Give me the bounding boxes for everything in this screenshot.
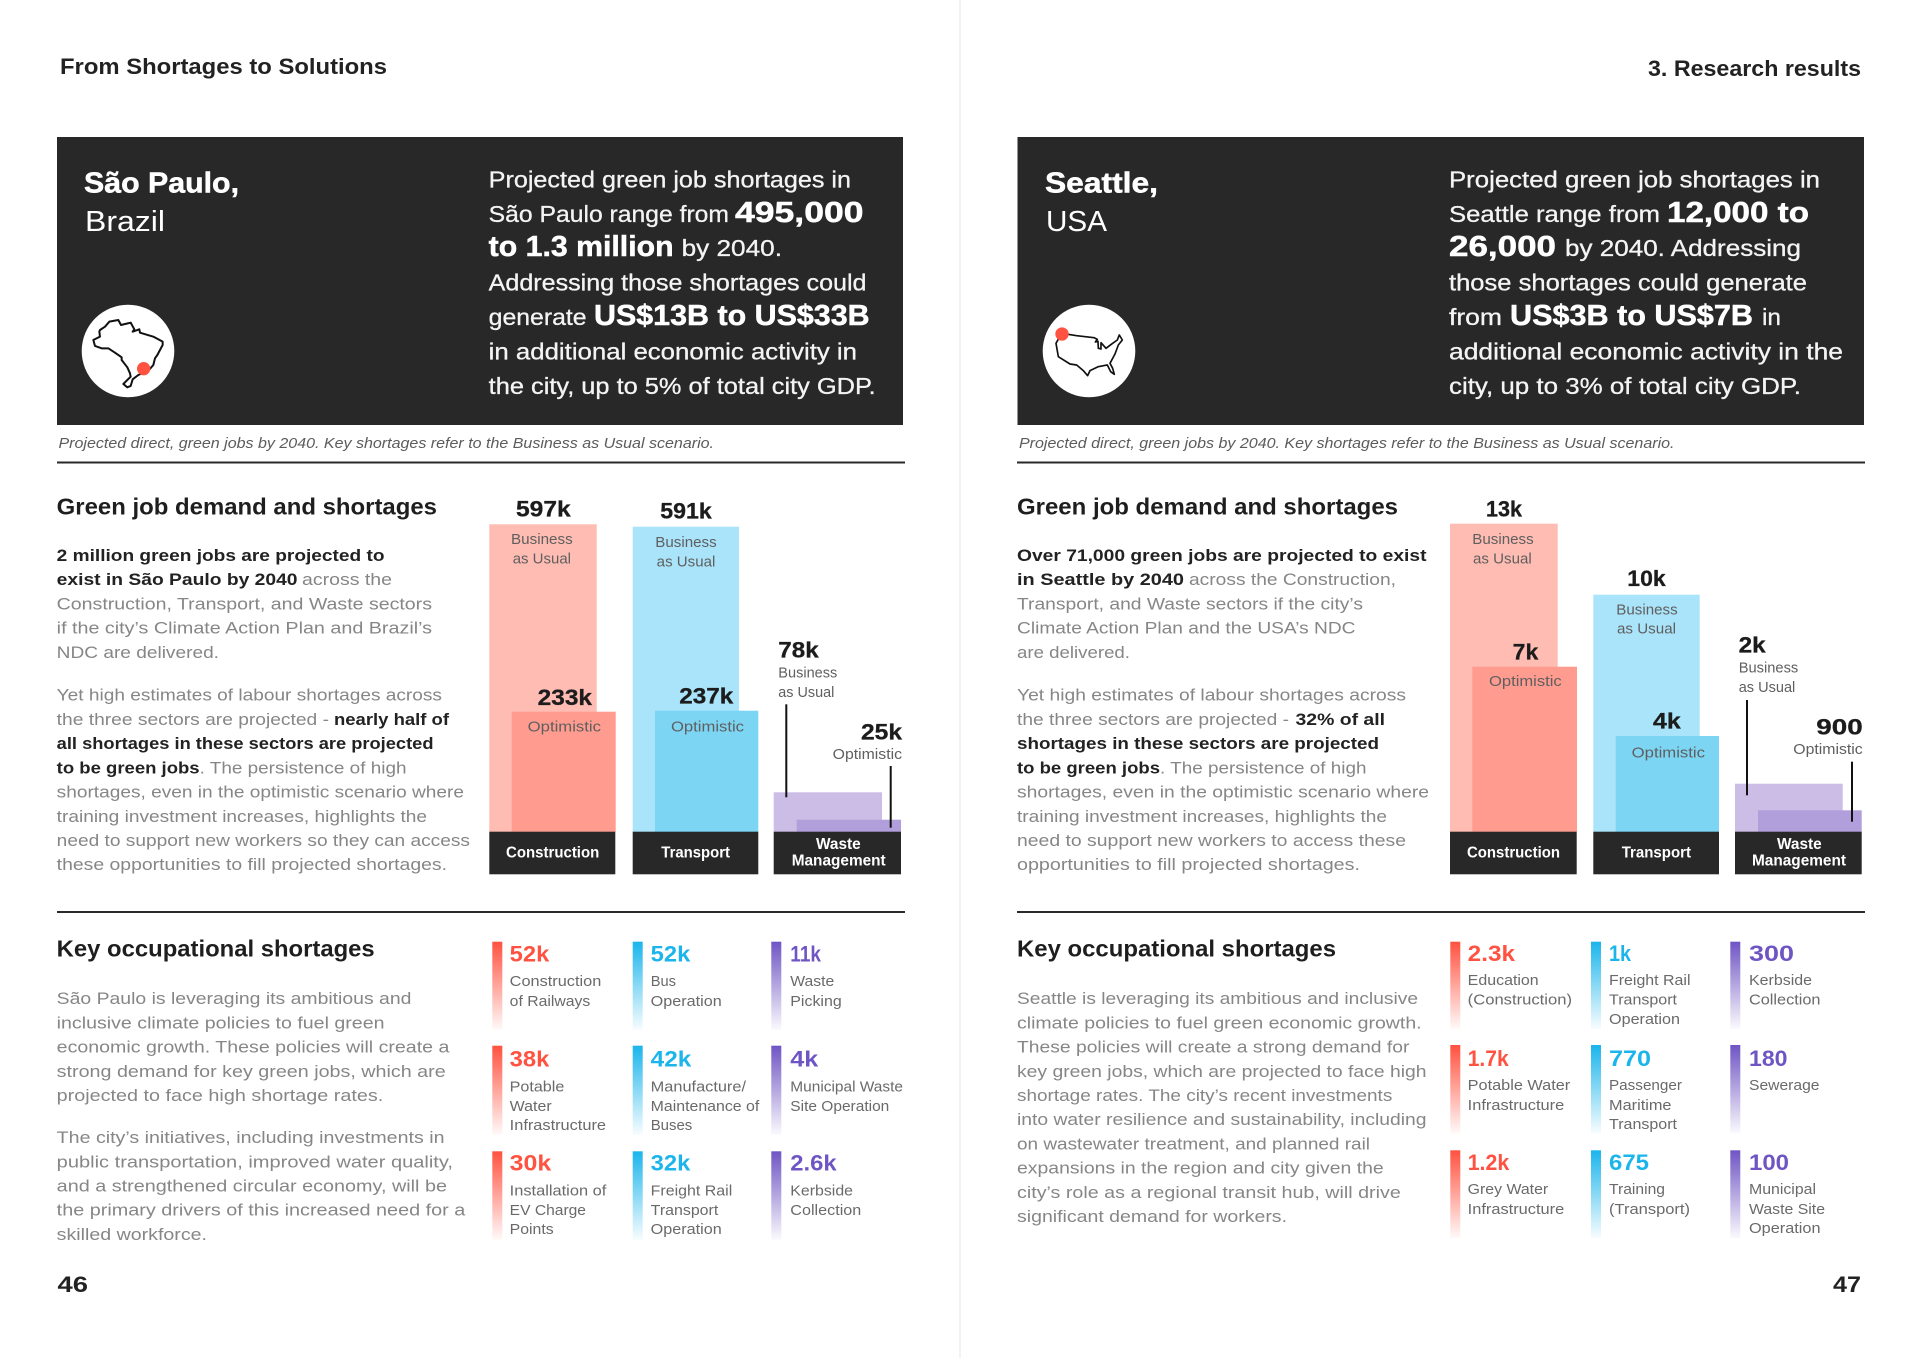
stat: 32k Freight Rail Transport Operation: 32k [651, 1151, 691, 1176]
caption: Seattle: Projected direct, green jobs by 2040. Key shortages refer to the Business as Usual scenario. [1019, 436, 1674, 452]
bars: Transport: 10k [1627, 566, 1666, 591]
stat: 11k Waste Picking [771, 942, 842, 1030]
bars: Construction [489, 497, 616, 874]
text block: Seattle demand: need to support new workers to access these [1017, 831, 1406, 850]
summary text: Seattle: Seattle range from [1449, 201, 1660, 227]
text block: Seattle occupations: Seattle is leveraging its ambitious and inclusive [1017, 989, 1418, 1008]
stat: 1.7k Potable Water Infrastructure: Infrastructure [1468, 1097, 1564, 1114]
stat: 770 Passenger Maritime Transport: Passenger [1609, 1077, 1682, 1094]
text block: São Paulo demand: if the city’s Climate Action Plan and Brazil’s [57, 619, 432, 638]
panel: Seattle summary [1018, 137, 1864, 425]
icon: USA map with Seattle marker [1043, 305, 1135, 397]
text block: São Paulo demand: exist in São Paulo by 2040 [57, 570, 298, 589]
stat: 675 Training (Transport): 675 [1609, 1150, 1649, 1175]
bars: Transport: Business [655, 534, 717, 551]
bars: Waste Management: Optimistic [1793, 741, 1863, 758]
stat: 300 Kerbside Collection [1730, 941, 1820, 1029]
bars: Construction: 597k [516, 497, 572, 522]
stat: 42k Manufacture/Maintenance of Buses [633, 1046, 760, 1135]
bars: Waste Management: 900 [1816, 714, 1863, 739]
text block: São Paulo occupations: The city’s initiatives, including investments in [57, 1128, 444, 1147]
summary text: São Paulo: in additional economic activity in [489, 338, 857, 364]
bars: Construction: as Usual [513, 550, 571, 567]
stat: 4k Municipal Waste Site Operation: Municipal Waste [790, 1079, 903, 1096]
bars: Transport: Transport [1622, 845, 1691, 862]
stat: 4k Municipal Waste Site Operation: Site Operation [790, 1098, 889, 1115]
summary text: Seattle: those shortages could generate [1449, 270, 1807, 296]
stat: 180 Sewerage [1730, 1045, 1820, 1134]
stat: 4k Municipal Waste Site Operation: 4k [790, 1047, 819, 1072]
stat grid: Seattle occupations [1450, 941, 1825, 1238]
stat: 675 Training (Transport): (Transport) [1609, 1201, 1690, 1218]
bars: Construction: 233k [538, 685, 593, 710]
country name: USA: USA [1046, 206, 1108, 238]
text block: Seattle demand: the three sectors are projected - [1017, 710, 1289, 729]
stat: 4k Municipal Waste Site Operation [771, 1046, 903, 1135]
stat: 38k Potable Water Infrastructure [492, 1046, 606, 1135]
stat: 100 Municipal Waste Site Operation: Operation [1749, 1220, 1820, 1237]
summary text: Seattle: additional economic activity in the [1449, 338, 1843, 364]
stat: 2.3k Education (Construction): (Construction) [1468, 992, 1572, 1009]
page header: right: 3. Research results [1648, 56, 1861, 81]
bars: Construction [1450, 497, 1577, 874]
text block: São Paulo demand: the three sectors are projected - [57, 710, 329, 729]
stat: 38k Potable Water Infrastructure: Water [510, 1098, 552, 1115]
text block: Seattle occupations [1017, 989, 1426, 1226]
stat: 1k Freight Rail Transport Operation: Operation [1609, 1011, 1680, 1028]
text block: Seattle demand [1017, 546, 1429, 874]
stat: 38k Potable Water Infrastructure: Potable [510, 1079, 564, 1096]
summary text: São Paulo [489, 166, 876, 399]
heading: Seattle occupations: Key occupational shortages [1017, 936, 1336, 962]
text block: Seattle demand: training investment increases, highlights the [1017, 807, 1387, 826]
stat: 2.3k Education (Construction): 2.3k [1468, 941, 1516, 966]
bar chart: São Paulo job demand [489, 497, 903, 874]
text block: São Paulo demand: nearly half of [334, 710, 449, 729]
text block: São Paulo demand: need to support new workers so they can access [57, 831, 470, 850]
stat: 30k Installation of EV Charge Points [492, 1151, 607, 1240]
stat: 52k Construction of Railways: 52k [510, 942, 550, 967]
text block: Seattle demand: Transport, and Waste sectors if the city’s [1017, 594, 1363, 613]
city name: São Paulo: São Paulo, [84, 168, 239, 200]
text block: São Paulo occupations: strong demand for key green jobs, which are [57, 1062, 446, 1081]
summary text: São Paulo: São Paulo range from [489, 201, 729, 227]
bar chart: Seattle job demand [1450, 497, 1863, 874]
text block: São Paulo occupations [57, 989, 466, 1244]
stat: 1k Freight Rail Transport Operation: Freight Rail [1609, 972, 1690, 989]
summary text: São Paulo: Addressing those shortages could [489, 270, 866, 296]
stat: 770 Passenger Maritime Transport [1591, 1045, 1682, 1134]
text block: São Paulo demand: these opportunities to fill projected shortages. [57, 855, 447, 874]
bars: Waste Management: Business [1739, 660, 1798, 676]
stat: 11k Waste Picking: Picking [790, 993, 842, 1010]
summary text: Seattle: by 2040. Addressing [1565, 235, 1801, 261]
stat: 52k Bus Operation [633, 942, 722, 1030]
text block: Seattle demand: opportunities to fill projected shortages. [1017, 855, 1360, 874]
stat: 32k Freight Rail Transport Operation: Freight Rail [651, 1183, 732, 1200]
text block: São Paulo demand: across the [302, 570, 392, 589]
text block: São Paulo demand: Construction, Transport, and Waste sectors [57, 594, 432, 613]
bars: Waste Management: Management [792, 853, 886, 870]
bars: Waste Management: 78k [778, 638, 820, 663]
summary text: Seattle [1449, 166, 1843, 399]
stat: 52k Construction of Railways [492, 942, 601, 1030]
stat: 300 Kerbside Collection: Kerbside [1749, 972, 1812, 989]
bars: Waste Management: as Usual [1739, 679, 1795, 696]
bars: Waste Management: Optimistic [833, 746, 903, 763]
bars: Transport: Optimistic [671, 719, 745, 736]
stat: 42k Manufacture/Maintenance of Buses: Manufacture/ [651, 1079, 747, 1096]
text block: Seattle occupations: into water resilience and sustainability, including [1017, 1110, 1426, 1129]
text block: São Paulo occupations: São Paulo is leveraging its ambitious and [57, 989, 411, 1008]
stat: 770 Passenger Maritime Transport: Maritime [1609, 1097, 1672, 1114]
summary text: São Paulo: generate [489, 304, 587, 330]
bars: Construction: 7k [1513, 639, 1539, 664]
text block: São Paulo occupations: public transportation, improved water quality, [57, 1152, 453, 1171]
stat: 52k Bus Operation: Bus [651, 973, 676, 990]
text block: Seattle occupations: on wastewater treatment, and planned rail [1017, 1134, 1370, 1153]
stat: 52k Bus Operation: 52k [651, 942, 691, 967]
stat: 100 Municipal Waste Site Operation: Waste Site [1749, 1201, 1825, 1218]
stat: 1k Freight Rail Transport Operation [1591, 941, 1690, 1029]
summary text: São Paulo: US$13B to US$33B [594, 300, 870, 332]
stat: 42k Manufacture/Maintenance of Buses: Buses [651, 1117, 692, 1134]
stat: 2.3k Education (Construction) [1450, 941, 1572, 1029]
text block: São Paulo demand [57, 546, 470, 874]
summary text: Seattle: city, up to 3% of total city GDP. [1449, 373, 1801, 399]
stat: 1.2k Grey Water Infrastructure: Infrastructure [1468, 1201, 1564, 1218]
text block: Seattle demand: across the Construction, [1189, 570, 1396, 589]
stat: 100 Municipal Waste Site Operation: 100 [1749, 1150, 1789, 1175]
bars: Construction: 13k [1486, 497, 1523, 522]
bars: Transport: as Usual [1617, 620, 1676, 637]
stat: 2.6k Kerbside Collection: Kerbside [790, 1183, 853, 1200]
stat: 52k Bus Operation: Operation [651, 993, 722, 1010]
bars: Transport: 591k [660, 499, 712, 524]
stat: 100 Municipal Waste Site Operation: Municipal [1749, 1181, 1816, 1198]
bars: Transport: as Usual [657, 553, 715, 570]
text block: Seattle demand: to be green jobs [1017, 758, 1160, 777]
bars: Waste Management [774, 638, 903, 874]
bars: Transport: 4k [1653, 708, 1682, 733]
bars: Transport: Optimistic [1632, 744, 1706, 761]
text block: Seattle demand: Over 71,000 green jobs are projected to exist [1017, 546, 1427, 565]
text block: São Paulo demand: shortages, even in the optimistic scenario where [57, 782, 464, 802]
stat: 42k Manufacture/Maintenance of Buses: 42k [651, 1047, 692, 1072]
stat: 1.2k Grey Water Infrastructure: 1.2k [1468, 1150, 1510, 1175]
stat: 1.7k Potable Water Infrastructure: 1.7k [1468, 1046, 1509, 1071]
text block: Seattle demand: Climate Action Plan and the USA’s NDC [1017, 619, 1356, 638]
stat: 30k Installation of EV Charge Points: EV Charge [510, 1202, 586, 1219]
bars: Construction: Business [1472, 531, 1534, 548]
summary text: Seattle: in [1762, 304, 1781, 330]
stat: 1k Freight Rail Transport Operation: 1k [1609, 941, 1632, 966]
stat: 30k Installation of EV Charge Points: Installation of [510, 1183, 607, 1200]
stat: 100 Municipal Waste Site Operation [1730, 1150, 1825, 1238]
summary text: São Paulo: Projected green job shortages in [489, 166, 851, 192]
stat: 675 Training (Transport): Training [1609, 1181, 1665, 1198]
stat grid: São Paulo occupations [492, 942, 903, 1240]
stat: 11k Waste Picking: Waste [790, 973, 834, 990]
bars: Waste Management [1735, 632, 1863, 874]
heading: Seattle demand: Green job demand and shortages [1017, 493, 1398, 519]
text block: Seattle demand: 32% of all [1296, 710, 1385, 729]
bars: Construction: Construction [1467, 845, 1560, 862]
stat: 770 Passenger Maritime Transport: Transport [1609, 1116, 1678, 1133]
bars: Waste Management: 25k [861, 719, 903, 744]
stat: 1k Freight Rail Transport Operation: Transport [1609, 992, 1678, 1009]
stat: 180 Sewerage: 180 [1749, 1046, 1788, 1071]
stat: 32k Freight Rail Transport Operation: Operation [651, 1221, 722, 1238]
text block: São Paulo demand: NDC are delivered. [57, 643, 219, 662]
stat: 38k Potable Water Infrastructure: 38k [510, 1047, 550, 1072]
stat: 1.2k Grey Water Infrastructure: Grey Water [1468, 1181, 1548, 1198]
text block: São Paulo demand: Yet high estimates of labour shortages across [57, 686, 442, 704]
text block: São Paulo demand: 2 million green jobs are projected to [57, 546, 384, 565]
text block: Seattle demand: shortages in these sectors are projected [1017, 734, 1379, 753]
summary text: Seattle: US$3B to US$7B [1510, 300, 1753, 332]
text block: São Paulo occupations: economic growth. These policies will create a [57, 1038, 450, 1057]
summary text: São Paulo: to 1.3 million [489, 231, 674, 263]
stat: 52k Construction of Railways: Construction [510, 973, 601, 990]
stat: 1.7k Potable Water Infrastructure: Potable Water [1468, 1077, 1570, 1094]
bars: Waste Management: 2k [1739, 632, 1767, 658]
country name: Brazil: Brazil [85, 206, 165, 238]
stat: 30k Installation of EV Charge Points: Points [510, 1221, 554, 1238]
text block: São Paulo demand: to be green jobs [57, 758, 200, 777]
text block: São Paulo occupations: and a strengthened circular economy, will be [57, 1176, 447, 1195]
stat: 11k Waste Picking: 11k [790, 942, 822, 967]
stat: 38k Potable Water Infrastructure: Infrastructure [510, 1117, 606, 1134]
text block: São Paulo occupations: skilled workforce. [57, 1225, 207, 1244]
text block: São Paulo occupations: the primary drivers of this increased need for a [57, 1201, 466, 1220]
stat: 770 Passenger Maritime Transport: 770 [1609, 1046, 1651, 1071]
summary text: São Paulo: the city, up to 5% of total city GDP. [489, 373, 876, 399]
text block: Seattle demand: Yet high estimates of labour shortages across [1017, 686, 1406, 704]
summary text: Seattle: 26,000 [1449, 231, 1556, 263]
stat: 180 Sewerage: Sewerage [1749, 1077, 1820, 1094]
stat: 2.6k Kerbside Collection: Collection [790, 1202, 861, 1219]
summary text: Seattle: from [1449, 304, 1502, 330]
text block: São Paulo demand: training investment increases, highlights the [57, 807, 427, 826]
bars: Construction: Optimistic [1489, 673, 1562, 690]
stat: 2.3k Education (Construction): Education [1468, 972, 1539, 989]
bars: Waste Management: as Usual [778, 684, 834, 701]
stat: 32k Freight Rail Transport Operation: Transport [651, 1202, 719, 1219]
caption: São Paulo: Projected direct, green jobs by 2040. Key shortages refer to the Business as Usual scenario. [58, 436, 714, 452]
stat: 42k Manufacture/Maintenance of Buses: Maintenance of [651, 1098, 760, 1115]
stat: 2.6k Kerbside Collection [771, 1151, 861, 1240]
stat: 30k Installation of EV Charge Points: 30k [510, 1151, 552, 1176]
summary text: São Paulo: by 2040. [682, 235, 782, 261]
panel: São Paulo summary [57, 137, 903, 425]
bars: Construction: Construction [506, 845, 599, 862]
stat: 300 Kerbside Collection: Collection [1749, 992, 1820, 1009]
bars: Waste Management: Management [1752, 853, 1846, 870]
page number: 47: 47 [1833, 1272, 1861, 1297]
summary text: São Paulo: 495,000 [735, 197, 864, 229]
bars: Transport [1593, 566, 1719, 874]
text block: Seattle demand: in Seattle by 2040 [1017, 570, 1184, 589]
heading: São Paulo demand: Green job demand and shortages [57, 493, 437, 519]
text block: Seattle occupations: shortage rates. The city’s recent investments [1017, 1086, 1392, 1105]
stat: 52k Construction of Railways: of Railways [510, 993, 590, 1010]
page number: 46: 46 [58, 1272, 88, 1297]
bars: Waste Management: Waste [1777, 836, 1822, 853]
stat: 32k Freight Rail Transport Operation [633, 1151, 732, 1240]
bars: Transport [633, 499, 758, 874]
stat: 675 Training (Transport) [1591, 1150, 1690, 1238]
bars: Transport: 237k [679, 683, 734, 708]
bars: Waste Management: Waste [816, 836, 861, 853]
stat: 1.2k Grey Water Infrastructure [1450, 1150, 1564, 1238]
summary text: Seattle: 12,000 to [1667, 197, 1809, 229]
text block: Seattle demand: are delivered. [1017, 643, 1130, 662]
bars: Construction: as Usual [1473, 550, 1532, 567]
bars: Construction: Business [511, 531, 573, 548]
text block: Seattle occupations: key green jobs, which are projected to face high [1017, 1062, 1426, 1081]
stat: 2.6k Kerbside Collection: 2.6k [790, 1151, 838, 1176]
text block: São Paulo demand: all shortages in these sectors are projected [57, 734, 434, 753]
text block: São Paulo occupations: projected to face high shortage rates. [57, 1086, 383, 1105]
text block: São Paulo occupations: inclusive climate policies to fuel green [57, 1013, 384, 1032]
text block: Seattle occupations: expansions in the region and city given the [1017, 1159, 1384, 1178]
bars: Construction: Optimistic [528, 719, 602, 736]
bars: Transport: Transport [661, 845, 730, 862]
text block: Seattle occupations: These policies will create a strong demand for [1017, 1038, 1410, 1057]
city name: Seattle: Seattle, [1045, 168, 1158, 200]
page header: left: From Shortages to Solutions [60, 54, 387, 79]
stat: 1.7k Potable Water Infrastructure [1450, 1045, 1570, 1134]
summary text: Seattle: Projected green job shortages in [1449, 166, 1820, 192]
text block: Seattle occupations: climate policies to fuel green economic growth. [1017, 1013, 1422, 1032]
text block: Seattle demand: shortages, even in the optimistic scenario where [1017, 782, 1429, 802]
bars: Transport: Business [1616, 601, 1678, 618]
stat: 300 Kerbside Collection: 300 [1749, 941, 1794, 966]
text block: São Paulo demand: . The persistence of high [200, 758, 406, 777]
bars: Waste Management: Business [778, 665, 837, 682]
text block: Seattle occupations: city’s role as a regional transit hub, will drive [1017, 1183, 1401, 1202]
icon: Brazil map with São Paulo marker [82, 305, 174, 397]
heading: São Paulo occupations: Key occupational shortages [57, 936, 375, 962]
text block: Seattle demand: . The persistence of high [1160, 758, 1366, 777]
text block: Seattle occupations: significant demand for workers. [1017, 1207, 1287, 1226]
